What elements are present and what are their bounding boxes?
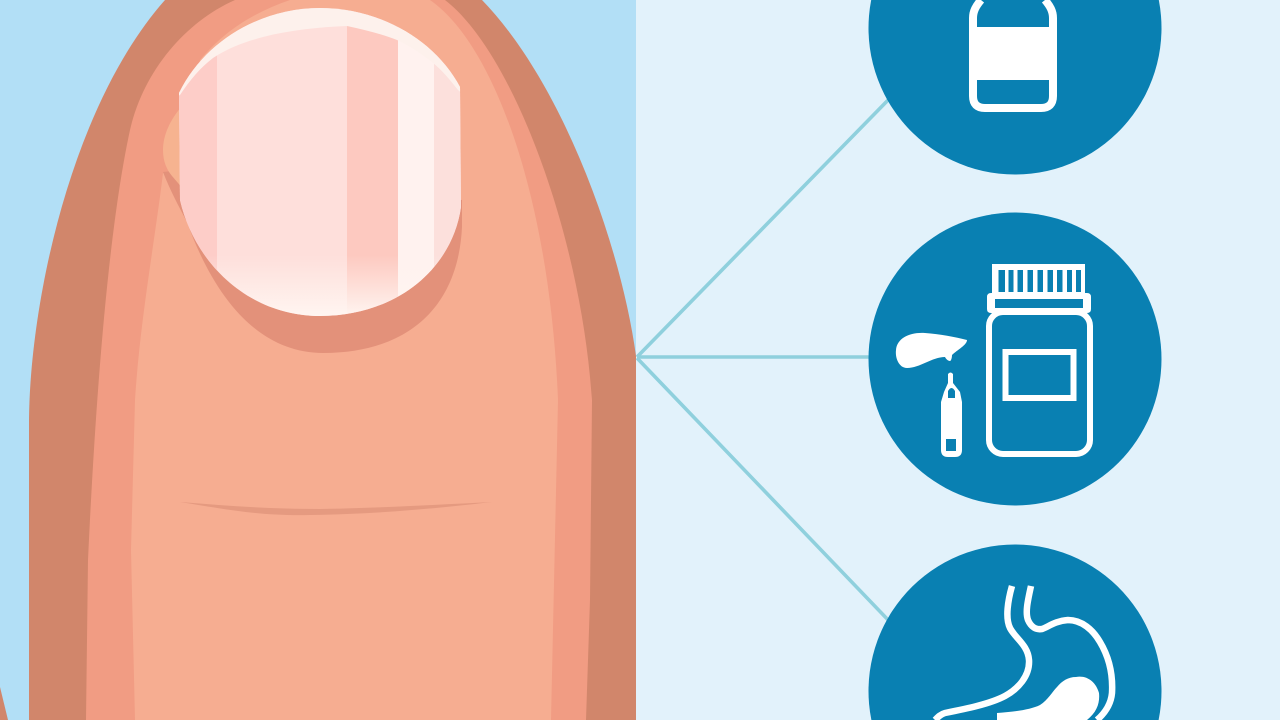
finger light tone: [131, 0, 558, 720]
panel: left background: [0, 0, 636, 720]
bottle label: [1006, 352, 1074, 398]
icon: liver, ampoule and pill bottle circle: [868, 212, 1162, 506]
bottle body: [989, 312, 1090, 454]
liver: [896, 333, 967, 368]
icon: top medicine bottle circle: [868, 0, 1162, 174]
nail fold shadow: [163, 170, 462, 353]
stomach outline: [935, 586, 1112, 720]
adjacent finger edge: [0, 687, 8, 720]
ampoule: [941, 372, 962, 457]
finger outer shade: [29, 0, 636, 720]
stomach contents: [997, 677, 1099, 720]
icon: stomach circle: [868, 544, 1162, 720]
connector lines: [637, 96, 892, 624]
cuticle: [163, 106, 184, 190]
panel: right background: [636, 0, 1280, 720]
icon: finger: [29, 0, 636, 720]
finger mid tone: [86, 0, 592, 720]
knuckle crease: [180, 502, 492, 515]
bottle cap: [992, 264, 1085, 293]
nail: [170, 0, 470, 320]
bottle neck: [987, 293, 1091, 313]
